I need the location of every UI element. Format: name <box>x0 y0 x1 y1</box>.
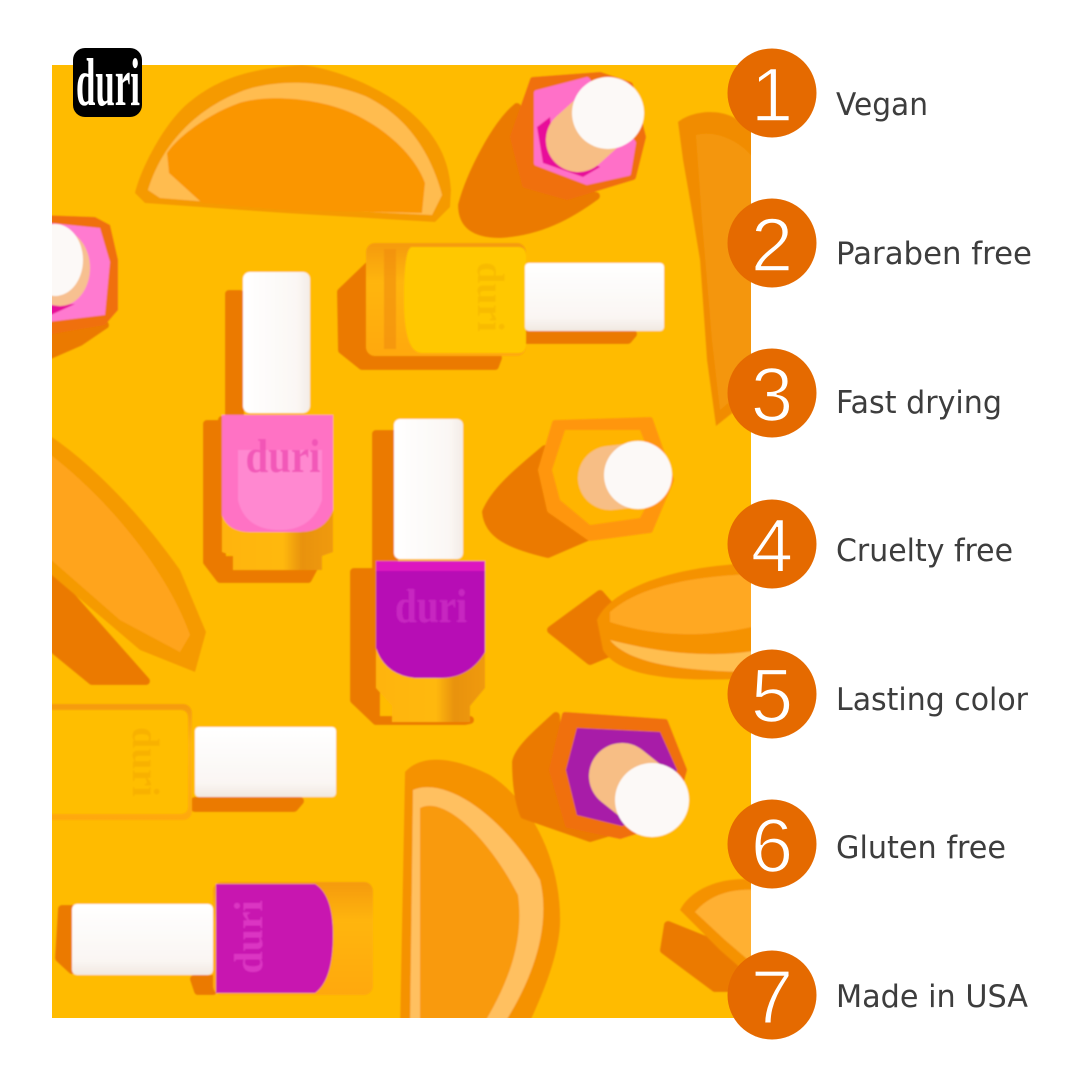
bottle: purple, vertical <box>354 419 485 722</box>
feature 1: Vegan: 1 <box>751 53 793 138</box>
bottle: pink, top view, top centre <box>462 75 644 234</box>
feature 2: Paraben free: Paraben free <box>836 236 1032 272</box>
orange slice: bottom centre <box>400 760 560 1030</box>
logo: duri <box>73 44 142 120</box>
orange slice: right middle <box>551 563 760 680</box>
feature 5: Lasting color <box>728 650 1028 739</box>
bottle: yellow, horizontal, top <box>341 243 664 366</box>
embossed logo: duri <box>226 900 271 974</box>
feature 4: Cruelty free: Cruelty free <box>836 533 1013 569</box>
feature 7: Made in USA <box>728 950 1028 1040</box>
feature 7: Made in USA: 7 <box>751 955 793 1040</box>
embossed logo: duri <box>469 262 511 332</box>
embossed logo: duri <box>395 580 467 633</box>
bottle: yellow, horizontal, lower left <box>36 704 336 820</box>
feature 5: Lasting color: 5 <box>751 654 793 739</box>
feature 4: Cruelty free <box>728 500 1013 589</box>
feature 3: Fast drying: 3 <box>751 353 793 438</box>
feature 6: Gluten free: 6 <box>751 804 793 889</box>
embossed logo: duri <box>246 430 320 483</box>
feature 4: Cruelty free: 4 <box>751 504 793 589</box>
logo: duri: duri <box>76 44 140 120</box>
orange slice: top right <box>678 112 755 426</box>
feature 6: Gluten free: Gluten free <box>836 830 1006 866</box>
feature 3: Fast drying: Fast drying <box>836 385 1002 421</box>
feature 3: Fast drying <box>728 348 1002 438</box>
feature 7: Made in USA: Made in USA <box>836 979 1028 1015</box>
bottle: amber, top view, centre right <box>486 420 672 554</box>
embossed logo: duri <box>124 727 166 797</box>
feature 5: Lasting color: Lasting color <box>836 682 1028 718</box>
feature 2: Paraben free <box>728 198 1032 288</box>
feature 6: Gluten free <box>728 800 1006 889</box>
feature 2: Paraben free: 2 <box>751 203 793 288</box>
feature 1: Vegan <box>728 48 928 138</box>
orange slice: bottom right <box>664 879 760 988</box>
orange slice: top <box>135 65 451 222</box>
feature 1: Vegan: Vegan <box>836 87 928 123</box>
orange slice: left <box>40 430 206 681</box>
bottle: purple, top view, lower right <box>516 715 689 838</box>
bottle: pink, vertical <box>207 272 333 579</box>
bottle: pink, top view, left edge <box>52 214 119 360</box>
bottle: magenta, horizontal, bottom <box>59 882 373 995</box>
photo panel: nail polish bottles and orange slices <box>27 55 765 1030</box>
